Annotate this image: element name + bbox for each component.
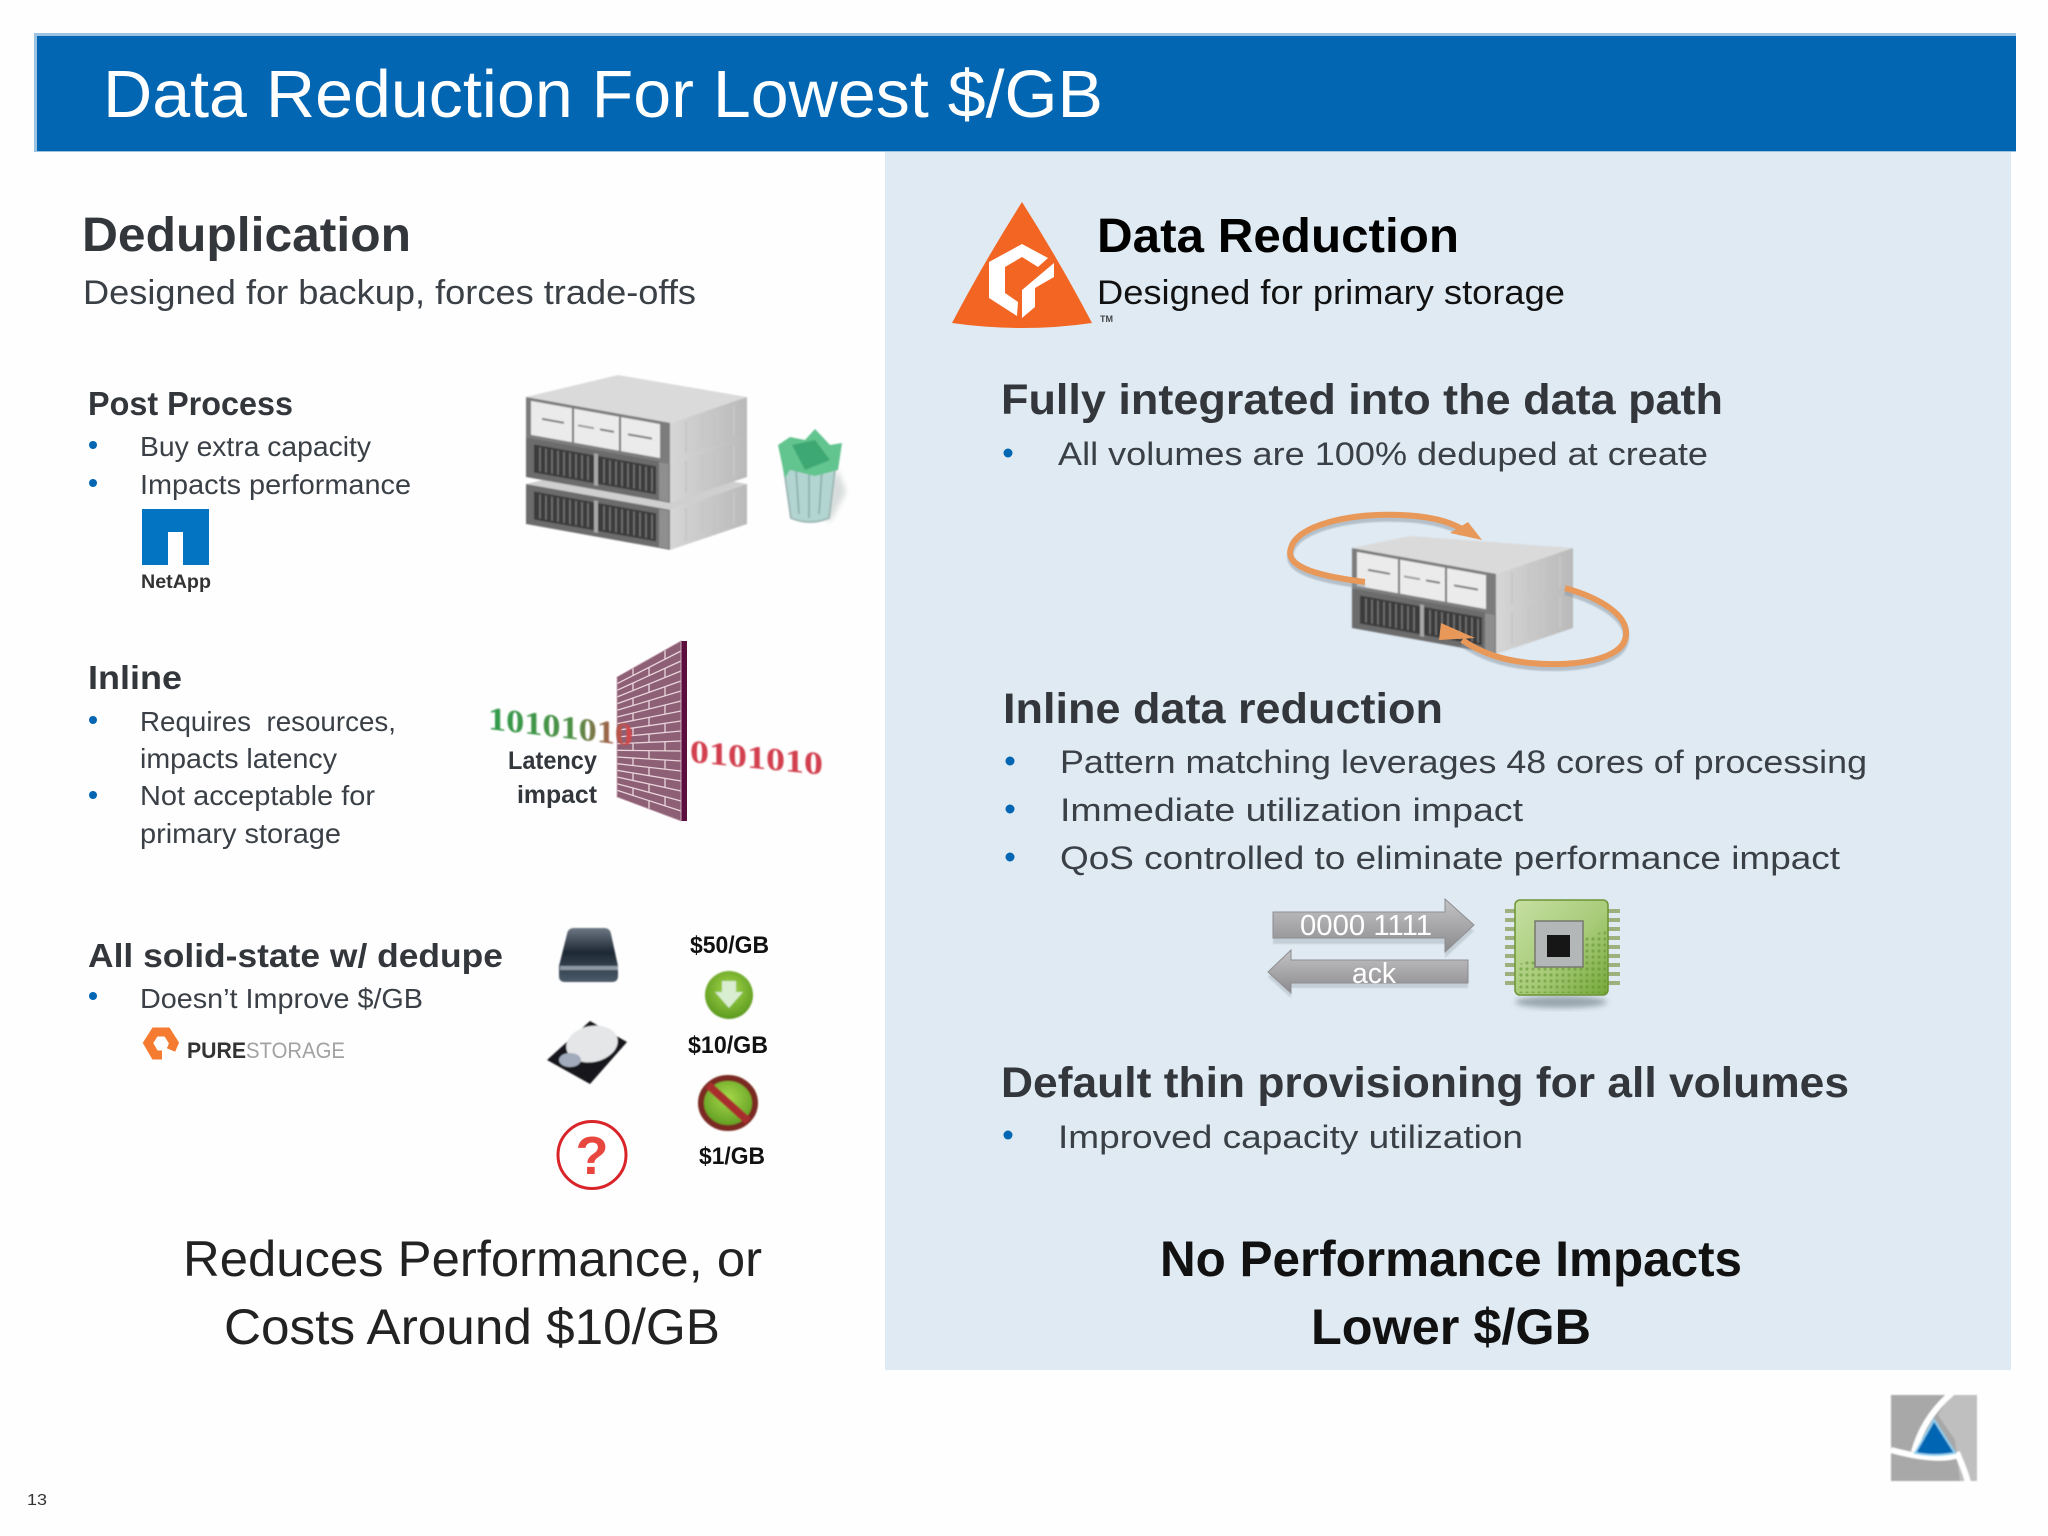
section: inline data reduction: QoS controlled to eliminate performance impact	[1060, 840, 1840, 876]
icon: question mark: ?	[576, 1126, 608, 1186]
text: latency impact	[508, 747, 598, 809]
diagram: server with rotating arrows	[1290, 515, 1626, 668]
section: inline: Requires resources,	[140, 706, 396, 737]
panel: data reduction	[952, 202, 1867, 1355]
section: fully integrated: Fully integrated into the data path	[1001, 376, 1723, 424]
icon: processor chip	[1505, 900, 1620, 1008]
arrow: data to chip	[1273, 899, 1474, 958]
icon: netapp logo	[141, 509, 211, 593]
section: thin provisioning: Default thin provisioning for all volumes	[1001, 1059, 1849, 1107]
section: inline data reduction	[1003, 685, 1867, 876]
conclusion: data reduction: Lower $/GB	[1311, 1299, 1591, 1355]
icon: solid state drive	[559, 928, 618, 982]
section: post process: Impacts performance	[140, 469, 411, 500]
section: all solid-state: All solid-state w/ dedupe	[88, 937, 503, 974]
icon: pure storage logo: STORAGE	[246, 1038, 345, 1063]
diagram: latency wall	[488, 641, 823, 821]
section: inline data reduction: Pattern matching leverages 48 cores of processing	[1060, 744, 1867, 780]
section: post process	[88, 385, 411, 500]
arrow: bottom	[1439, 588, 1626, 668]
subheading: data reduction: Designed for primary storage	[1097, 274, 1565, 312]
labels: price per gb: $50/GB	[690, 932, 769, 959]
text: latency impact: impact	[517, 781, 598, 809]
arrow: top	[1290, 515, 1482, 586]
conclusion: deduplication: Reduces Performance, or	[183, 1231, 762, 1287]
text: outgoing bits: 0101010	[690, 734, 823, 783]
arrow: acknowledgement: ack	[1352, 958, 1396, 990]
section: inline: impacts latency	[140, 743, 337, 774]
icon: brick wall	[617, 641, 687, 821]
icon: netapp logo: NetApp	[141, 572, 211, 593]
arrow: data to chip: 0000 1111	[1300, 910, 1432, 942]
title: Data Reduction For Lowest $/GB	[103, 57, 1103, 132]
conclusion: deduplication	[183, 1231, 762, 1355]
section: all solid-state	[88, 937, 503, 1014]
section: post process: Post Process	[88, 385, 293, 422]
section: thin provisioning: Improved capacity utilization	[1058, 1119, 1523, 1155]
heading: deduplication: Deduplication	[82, 209, 411, 262]
section: all solid-state: Doesn’t Improve $/GB	[140, 983, 423, 1014]
labels: price per gb: $10/GB	[688, 1032, 768, 1059]
icon: pure storage logo	[148, 1032, 345, 1063]
icon: pure storage logo: PURE	[187, 1038, 246, 1063]
arrow: acknowledgement	[1268, 950, 1468, 998]
icon: trash can	[778, 429, 846, 522]
title banner	[34, 33, 2016, 152]
labels: price per gb: $1/GB	[699, 1143, 765, 1170]
icon: server	[1352, 536, 1573, 654]
conclusion: data reduction	[1160, 1231, 1742, 1355]
section: inline: Inline	[88, 659, 182, 696]
section: inline data reduction: Inline data reduction	[1003, 685, 1443, 733]
icon: server stack	[526, 375, 747, 550]
section: inline: primary storage	[140, 818, 341, 849]
section: inline data reduction: Immediate utilization impact	[1060, 792, 1523, 828]
icon: green down arrow	[705, 971, 753, 1019]
conclusion: data reduction: No Performance Impacts	[1160, 1231, 1742, 1287]
section: thin provisioning	[1001, 1059, 1849, 1155]
section: inline	[88, 659, 396, 849]
labels: price per gb	[688, 932, 769, 1170]
page number: 13	[27, 1492, 47, 1509]
panel: deduplication	[82, 209, 846, 1355]
section: post process: Buy extra capacity	[140, 431, 371, 462]
icon: question mark	[558, 1122, 626, 1188]
subheading: deduplication: Designed for backup, forces trade-offs	[83, 274, 696, 312]
icon: corner company logo	[1891, 1393, 1977, 1483]
icon: orange triangle logo	[952, 202, 1113, 328]
panel: data reduction background	[885, 152, 2011, 1370]
section: fully integrated	[1001, 376, 1723, 472]
heading: data reduction: Data Reduction	[1097, 210, 1459, 263]
icon: hard disk drive	[547, 1021, 627, 1084]
icon: prohibited price drop	[701, 1078, 755, 1128]
section: fully integrated: All volumes are 100% deduped at create	[1058, 436, 1708, 472]
text: incoming bits: 10101010	[488, 700, 633, 754]
section: inline: Not acceptable for	[140, 780, 375, 811]
text: latency impact: Latency	[508, 747, 597, 775]
icon: orange triangle logo: TM	[1100, 314, 1113, 324]
conclusion: deduplication: Costs Around $10/GB	[224, 1299, 720, 1355]
